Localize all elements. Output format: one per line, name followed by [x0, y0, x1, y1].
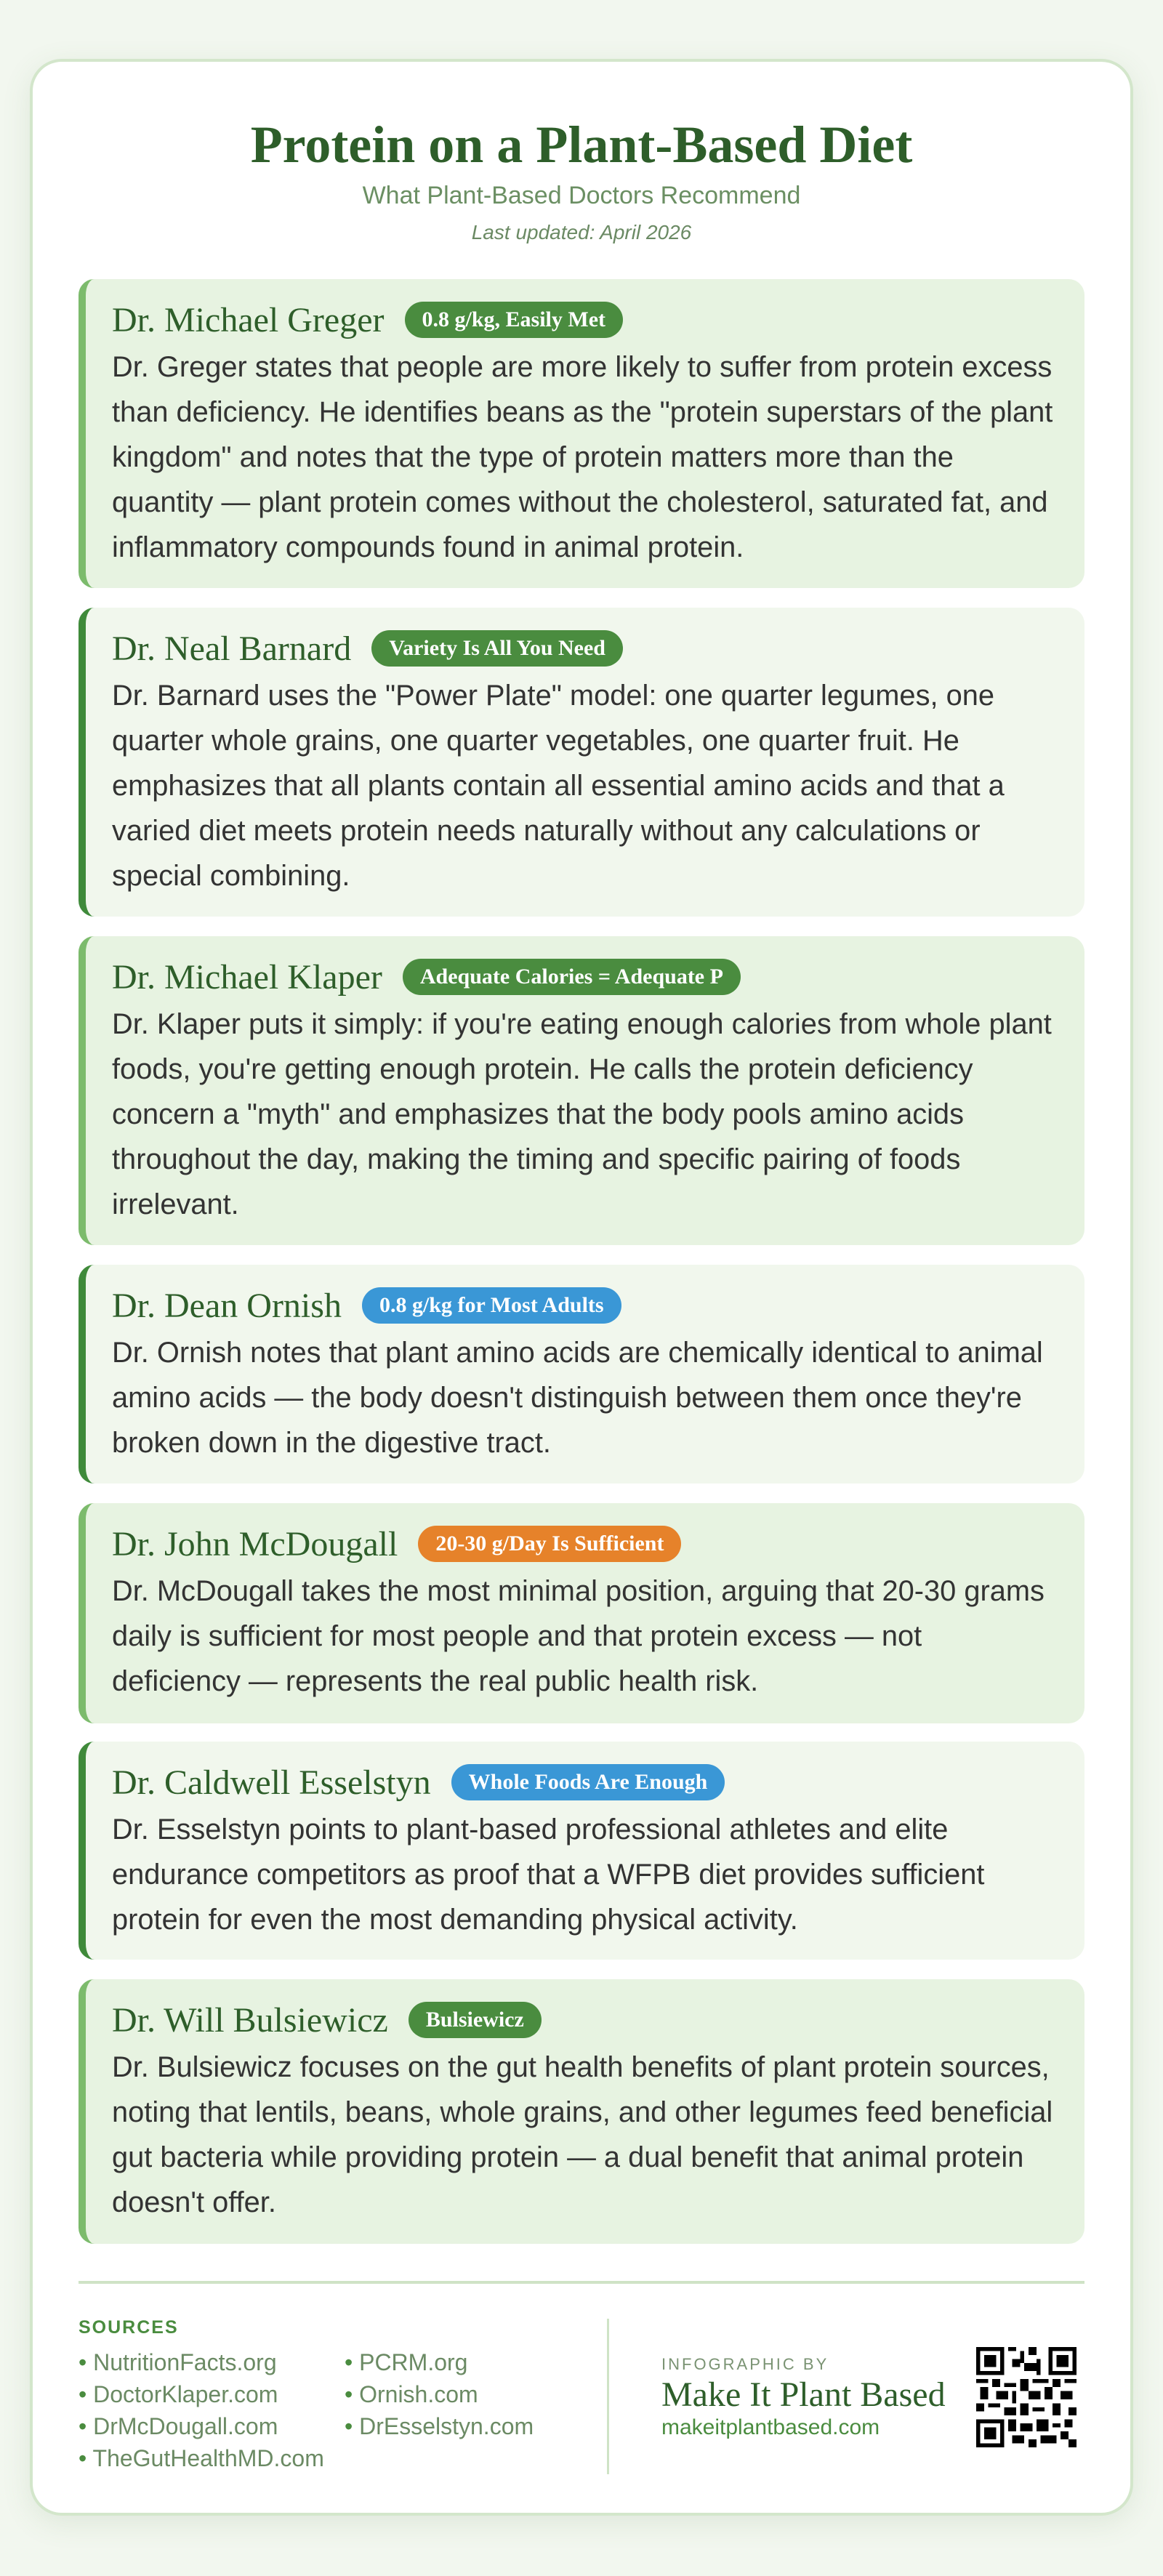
subtitle: What Plant-Based Doctors Recommend	[363, 182, 800, 209]
header: Greger	[112, 301, 623, 339]
text: McDougall: Dr. McDougall takes the most minimal position, arguing that 20-30 grams daily is sufficient for most people and that protein excess — not deficiency — represents the real public health risk.	[112, 1575, 1045, 1697]
panel: Bulsiewicz	[79, 1979, 1084, 2244]
header: McDougall: Dr. John McDougall	[112, 1525, 398, 1563]
text: Esselstyn: Dr. Esselstyn points to plant-based professional athletes and elite endurance competitors as proof that a WFPB diet provides sufficient protein for even the most demanding physical activity.	[112, 1814, 984, 1936]
panel: Esselstyn	[79, 1742, 1084, 1960]
header: Ornish: 0.8 g/kg for Most Adults	[379, 1293, 604, 1317]
text: Bulsiewicz: Dr. Bulsiewicz focuses on the gut health benefits of plant protein sources, noting that lentils, beans, whole grains, and other legumes feed beneficial gut bacteria while providing protein — a dual benefit that animal protein doesn't offer.	[112, 2051, 1053, 2218]
branding: makeitplantbased.com	[661, 2415, 880, 2439]
sources list: • DrMcDougall.com	[79, 2413, 278, 2439]
sources list: • DoctorKlaper.com	[79, 2381, 278, 2407]
sources list: • NutritionFacts.org	[79, 2349, 277, 2375]
header: Barnard: Dr. Neal Barnard	[112, 629, 351, 667]
header: Barnard	[112, 629, 623, 667]
panel: Barnard	[79, 608, 1084, 917]
panel: McDougall	[79, 1503, 1084, 1723]
sources list: • Ornish.com	[345, 2381, 478, 2407]
branding: Make It Plant Based	[661, 2375, 946, 2414]
header: Esselstyn: Dr. Caldwell Esselstyn	[112, 1763, 431, 1801]
header: Bulsiewicz	[112, 2000, 542, 2040]
header: Bulsiewicz: Bulsiewicz	[426, 2008, 524, 2032]
sources list	[79, 2349, 534, 2471]
header: Ornish: Dr. Dean Ornish	[112, 1287, 342, 1324]
header: McDougall: 20-30 g/Day Is Sufficient	[435, 1531, 664, 1555]
header: Klaper	[112, 958, 741, 996]
header: Bulsiewicz: Dr. Will Bulsiewicz	[112, 2000, 388, 2040]
panel: Ornish	[79, 1265, 1084, 1484]
last updated: Last updated: April 2026	[472, 221, 691, 243]
sources heading: SOURCES	[79, 2317, 179, 2338]
sources list: • PCRM.org	[345, 2349, 467, 2375]
header: Esselstyn	[112, 1763, 725, 1801]
header: Esselstyn: Whole Foods Are Enough	[469, 1770, 707, 1794]
text: Ornish: Dr. Ornish notes that plant amino acids are chemically identical to animal amino acids — the body doesn't distinguish between them once they're broken down in the digestive tract.	[112, 1337, 1043, 1459]
text: Klaper: Dr. Klaper puts it simply: if you're eating enough calories from whole plant foods, you're getting enough protein. He calls the protein deficiency concern a "myth" and emphasizes that the body pools amino acids throughout the day, making the timing and specific pairing of foods irrelevant.	[112, 1008, 1052, 1220]
sources list: • TheGutHealthMD.com	[79, 2445, 324, 2471]
header: Klaper: Adequate Calories = Adequate P	[420, 965, 723, 989]
panel: Klaper	[79, 936, 1084, 1245]
branding: INFOGRAPHIC BY	[661, 2355, 829, 2373]
header: Ornish	[112, 1287, 621, 1324]
branding	[661, 2355, 946, 2439]
header: Greger: Dr. Michael Greger	[112, 301, 385, 339]
header: Greger: 0.8 g/kg, Easily Met	[422, 307, 605, 331]
sources list: • DrEsselstyn.com	[345, 2413, 534, 2439]
header: Klaper: Dr. Michael Klaper	[112, 958, 382, 996]
text: Greger: Dr. Greger states that people are more likely to suffer from protein excess than deficiency. He identifies beans as the "protein superstars of the plant kingdom" and notes that the type of protein matters more than the quantity — plant protein comes without the cholesterol, saturated fat, and inflammatory compounds found in animal protein.	[112, 351, 1053, 563]
text: Barnard: Dr. Barnard uses the "Power Plate" model: one quarter legumes, one quarter whole grains, one quarter vegetables, one quarter fruit. He emphasizes that all plants contain all essential amino acids and that a varied diet meets protein needs naturally without any calculations or special combining.	[112, 680, 1005, 892]
title: Protein on a Plant-Based Diet	[251, 116, 912, 174]
header: Barnard: Variety Is All You Need	[389, 636, 605, 660]
header: McDougall	[112, 1525, 681, 1563]
panel: Greger	[79, 279, 1084, 588]
icon: QR code	[976, 2347, 1077, 2447]
